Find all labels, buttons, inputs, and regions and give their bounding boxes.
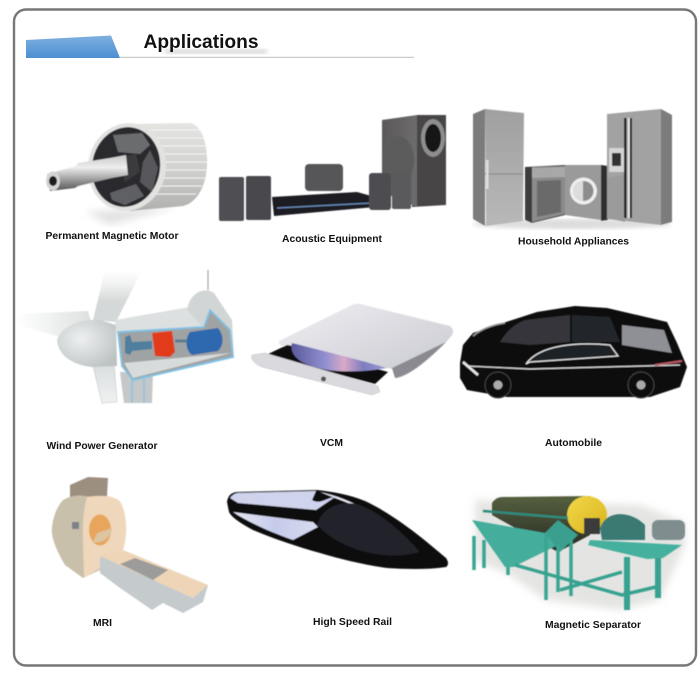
body crease [466, 365, 680, 369]
coupling [584, 518, 600, 534]
lower blade [93, 362, 117, 403]
image: acoustic equipment [219, 115, 446, 221]
upper blade [93, 270, 142, 322]
tower [120, 372, 153, 403]
label: automobile: Automobile [545, 437, 602, 449]
side windows [526, 344, 618, 364]
header banner [26, 31, 414, 58]
mast [207, 270, 209, 290]
hub [57, 320, 117, 367]
right fridge [607, 109, 661, 225]
table top [100, 550, 208, 598]
right speakers [369, 173, 391, 210]
header blue tab [26, 36, 120, 58]
blue generator [186, 328, 222, 355]
image: permanent magnet motor [46, 117, 207, 225]
image: MRI scanner [52, 477, 208, 613]
light blue side panel [233, 512, 318, 540]
red gearbox [152, 331, 175, 357]
left fridge [473, 109, 485, 226]
header title: Applications [144, 31, 259, 53]
right table [588, 540, 682, 559]
centre speaker [305, 164, 343, 191]
top box [70, 477, 108, 503]
horizontal blade [15, 311, 92, 337]
gantry side [52, 496, 100, 578]
gearbox [600, 514, 645, 540]
bore [89, 514, 111, 546]
legs and frame [474, 533, 571, 600]
wheels [485, 372, 511, 398]
tower feed lines [132, 375, 144, 403]
washer [565, 165, 601, 220]
image: magnetic separator [472, 496, 685, 610]
control panel [72, 522, 79, 529]
image: high speed rail [227, 490, 448, 569]
label: MRI: MRI [93, 617, 112, 629]
yellow drum end [567, 496, 607, 534]
left speakers [219, 177, 244, 221]
soft photo backdrop [475, 500, 685, 610]
gray pad [120, 558, 168, 580]
cockpit glass [317, 503, 420, 556]
header rule [120, 56, 414, 58]
label: wind: Wind Power Generator [46, 440, 158, 452]
label: VCM: VCM [320, 437, 343, 449]
label: acoustic: Acoustic Equipment [282, 233, 382, 245]
label: motor: Permanent Magnetic Motor [46, 230, 178, 242]
image: optical drive [251, 304, 453, 395]
label: appliances: Household Appliances [518, 236, 629, 248]
image: black car [460, 306, 687, 398]
table base [100, 552, 208, 613]
rear window [622, 325, 672, 353]
electric motor [652, 520, 685, 540]
highlight stripe [320, 492, 408, 540]
label: high speed rail: High Speed Rail [313, 616, 392, 628]
hopper [472, 520, 558, 567]
windscreen [500, 315, 570, 345]
subwoofer [412, 115, 446, 207]
stove [525, 165, 565, 223]
main shaft [125, 335, 152, 355]
nacelle cutaway [118, 310, 233, 380]
header title shadow [165, 49, 267, 54]
silver top strip [230, 491, 335, 510]
receiver [272, 192, 375, 216]
gantry front [83, 496, 126, 578]
image: household appliances [472, 109, 672, 229]
label: separator: Magnetic Separator [545, 619, 641, 631]
drum [492, 496, 590, 552]
image: wind turbine nacelle [15, 270, 234, 403]
hood highlight [473, 323, 505, 336]
nacelle top [115, 307, 204, 334]
